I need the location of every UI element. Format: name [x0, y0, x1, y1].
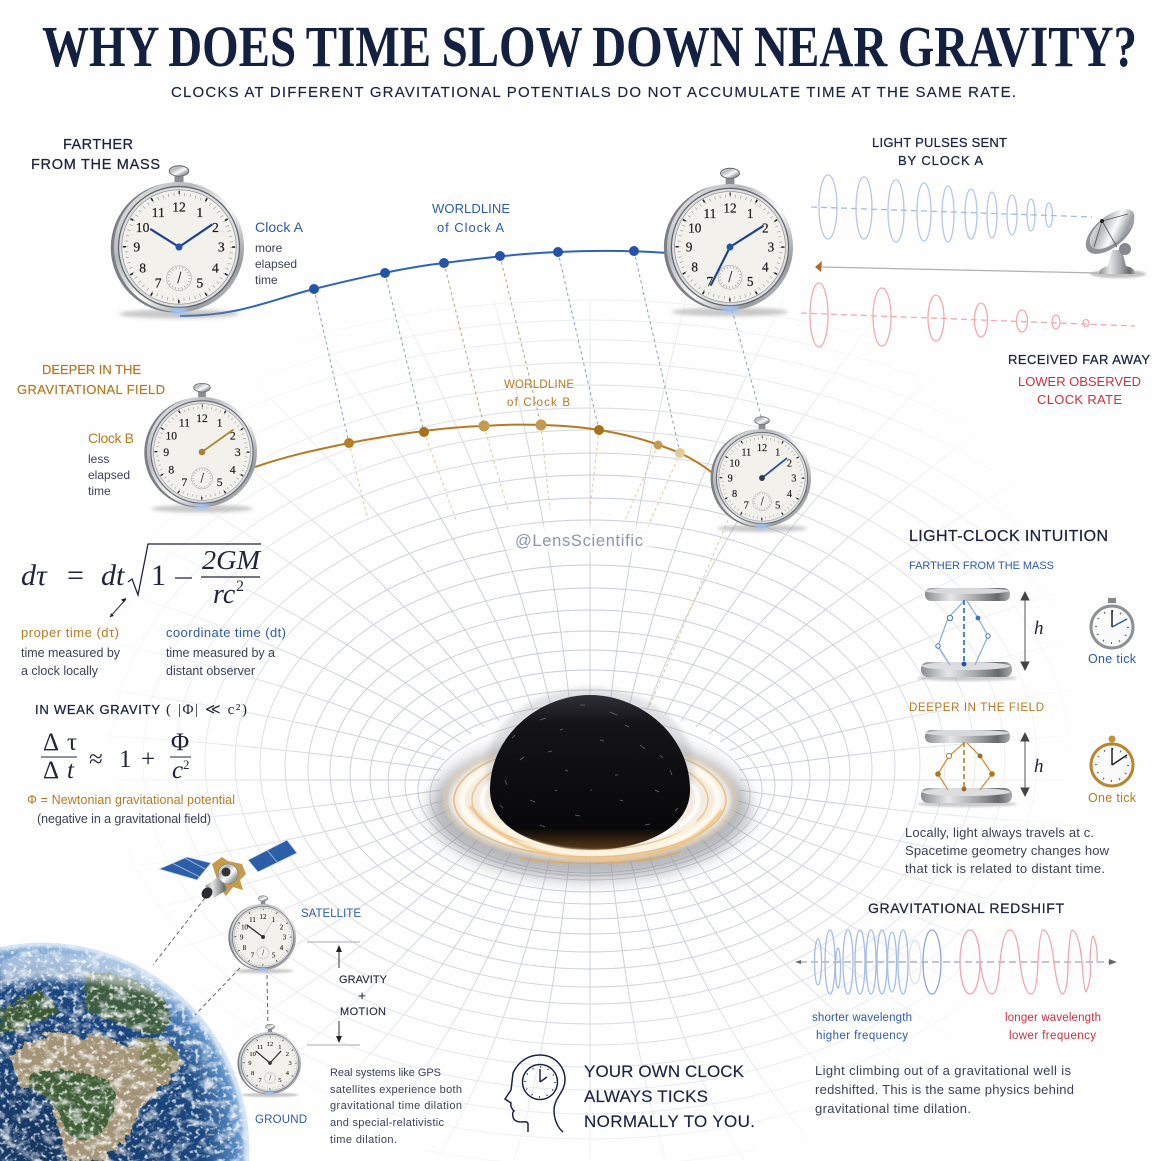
main formula: dτ	[21, 559, 48, 592]
heading	[872, 135, 1007, 168]
weak gravity formula: ≈	[89, 746, 103, 773]
main formula	[21, 544, 262, 617]
clock A farther from mass	[31, 137, 304, 318]
weak gravity formula: Δ	[43, 757, 59, 784]
farther label: FARTHER FROM THE MASS	[909, 560, 1054, 572]
watermark	[508, 526, 650, 552]
pocket watch B right: 10	[729, 459, 740, 470]
light pulses panel	[801, 135, 1150, 407]
gravitational redshift panel	[795, 900, 1117, 1116]
proper time text	[21, 625, 121, 678]
weak gravity formula	[35, 702, 247, 784]
worldline A label: WORLDLINE	[432, 201, 510, 216]
weak gravity formula: Φ	[171, 729, 189, 756]
gps panel	[153, 840, 462, 1146]
callout text: NORMALLY TO YOU.	[584, 1112, 755, 1131]
pocket watch B left	[144, 383, 257, 512]
heading	[17, 362, 165, 397]
clock B label: time	[88, 484, 111, 498]
your own clock callout	[505, 1055, 755, 1132]
gold worldline curve	[255, 425, 714, 474]
pocket watch A left: 9	[133, 240, 140, 255]
gold light clock: h	[1034, 756, 1044, 777]
pocket watch B left: 1	[217, 418, 223, 430]
pocket watch A right: 10	[688, 221, 702, 236]
gold light clock	[917, 730, 1044, 807]
blue labels: shorter wavelength	[812, 1012, 912, 1024]
level lines and arrows	[307, 942, 360, 1045]
heading	[31, 137, 160, 173]
main formula: 2	[236, 578, 244, 595]
pocket watch A right: 1	[747, 206, 753, 221]
coordinate time text: distant observer	[166, 664, 255, 678]
clock B deeper in field	[17, 362, 257, 512]
potential note: (negative in a gravitational field)	[37, 812, 211, 826]
weak gravity formula: +	[141, 746, 155, 773]
worldline B label: of Clock B	[507, 397, 570, 409]
pocket watch A right: 4	[762, 260, 769, 275]
red labels	[1005, 1012, 1101, 1042]
ground clock: 12	[267, 1041, 273, 1048]
blue worldline curve	[180, 251, 668, 316]
gold stopwatch	[1091, 736, 1133, 786]
gravity plus motion: +	[358, 988, 366, 1003]
ground clock: 9	[248, 1060, 251, 1067]
blue stopwatch	[1091, 598, 1133, 648]
gps paragraph: gravitational time dilation	[330, 1100, 462, 1112]
heading: FARTHER	[63, 137, 133, 153]
pocket watch A right: 8	[691, 260, 698, 275]
black hole with accretion disk	[430, 688, 750, 880]
ground clock: 5	[278, 1077, 282, 1084]
clock A label	[255, 219, 304, 287]
watermark: @LensScientific	[515, 532, 643, 550]
weak gravity formula: 1	[119, 746, 132, 773]
proper time text: a clock locally	[21, 664, 99, 678]
heading: FROM THE MASS	[31, 157, 160, 173]
potential note	[27, 793, 235, 826]
pocket watch A left: 3	[218, 240, 225, 255]
pocket watch B right: 1	[775, 447, 780, 458]
pocket watch A left: 8	[139, 260, 146, 275]
received label: RECEIVED FAR AWAY	[1008, 352, 1150, 367]
callout text: YOUR OWN CLOCK	[584, 1062, 745, 1081]
dashed projection lines	[314, 251, 762, 453]
satellite clock: 11	[249, 917, 256, 924]
clock B label: Clock B	[88, 430, 134, 446]
clock B label: elapsed	[88, 468, 130, 482]
pocket watch B left: 12	[196, 413, 208, 425]
ground clock: 4	[286, 1070, 290, 1077]
light clock intuition panel	[905, 528, 1137, 876]
pocket watch A right: 11	[703, 206, 716, 221]
ground clock: 1	[278, 1044, 282, 1051]
ground clock: 10	[249, 1051, 256, 1058]
proper time text: proper time (dτ)	[21, 625, 119, 640]
lower rate label: CLOCK RATE	[1037, 392, 1122, 407]
clock A label: more	[255, 241, 283, 255]
ground clock: 8	[251, 1070, 254, 1077]
red wave	[960, 930, 1097, 994]
weak gravity formula: 2	[183, 757, 190, 772]
callout text	[584, 1062, 755, 1131]
pocket watch B right: 9	[728, 473, 733, 484]
main formula: =	[67, 559, 84, 592]
clock B label	[88, 430, 134, 498]
explanation: that tick is related to distant time.	[905, 861, 1105, 876]
main formula: dt	[101, 559, 125, 592]
pocket watch B left: 11	[179, 418, 190, 430]
satellite clock: 7	[251, 952, 255, 959]
pocket watch A left: 2	[212, 220, 219, 235]
ground label: GROUND	[255, 1114, 307, 1126]
pocket watch B left: 2	[230, 430, 236, 442]
pocket watch A right: 7	[707, 274, 714, 289]
gravity plus motion: GRAVITY	[339, 974, 388, 986]
worldline A label: of Clock A	[437, 220, 504, 235]
earth	[0, 940, 250, 1161]
proper time text: time measured by	[21, 646, 121, 660]
clouds	[0, 940, 250, 1161]
pocket watch A left: 1	[196, 205, 203, 220]
pocket watch B left: 7	[182, 477, 188, 489]
ground clock: 2	[286, 1051, 289, 1058]
pocket watch A left: 11	[152, 205, 165, 220]
ground clock: 7	[258, 1077, 262, 1084]
black sphere	[490, 695, 690, 850]
pocket watch A left: 7	[155, 275, 162, 290]
pocket watch B right: 11	[741, 447, 751, 458]
pocket watch A right: 3	[768, 239, 775, 254]
pocket watch B left: 10	[165, 430, 177, 442]
pocket watch A left: 4	[212, 260, 219, 275]
worldline A label	[432, 201, 510, 235]
gravity plus motion: MOTION	[340, 1006, 386, 1018]
worldline of clock B	[255, 420, 728, 705]
ground clock: 3	[289, 1060, 292, 1067]
pocket watch A right: 2	[762, 221, 769, 236]
blue labels: higher frequency	[816, 1030, 908, 1042]
gps paragraph	[330, 1067, 462, 1146]
description: gravitational time dilation.	[815, 1101, 971, 1116]
red labels: lower frequency	[1009, 1030, 1096, 1042]
double arrow	[110, 599, 126, 617]
description: Light climbing out of a gravitational well is	[815, 1063, 1072, 1078]
gps paragraph: satellites experience both	[330, 1084, 462, 1096]
ground clock	[237, 1024, 301, 1097]
weak gravity formula: c	[172, 757, 183, 784]
pocket watch A right	[664, 168, 793, 316]
return arrow	[815, 261, 1098, 273]
pocket watch B right: 2	[787, 459, 792, 470]
satellite clock: 2	[280, 924, 284, 931]
callout text: ALWAYS TICKS	[584, 1087, 708, 1106]
pocket watch B left: 4	[230, 464, 236, 476]
satellite clock: 4	[280, 945, 284, 952]
pocket watch B right: 4	[787, 489, 792, 500]
pocket watch B right: 12	[757, 443, 767, 454]
main formula: 2GM	[202, 545, 262, 575]
pocket watch B right: 3	[791, 473, 796, 484]
blue pulses	[811, 175, 1092, 242]
lower rate label	[1018, 374, 1141, 407]
pocket watch B right	[711, 417, 811, 532]
weak gravity formula: ( |Φ| ≪ c²)	[166, 702, 247, 718]
blue wave	[814, 930, 941, 994]
clock A label: Clock A	[255, 219, 304, 235]
gps paragraph: and special-relativistic	[330, 1117, 444, 1129]
satellite	[159, 840, 297, 901]
fading dashed lines	[349, 425, 728, 705]
worldline of clock A	[180, 246, 762, 453]
heading: DEEPER IN THE	[42, 362, 141, 377]
satellite clock: 10	[241, 924, 249, 931]
red labels: longer wavelength	[1005, 1012, 1101, 1024]
pocket watch A left: 5	[196, 275, 203, 290]
worldline dots	[344, 420, 685, 458]
weak gravity formula: IN WEAK GRAVITY	[35, 702, 160, 717]
lower rate label: LOWER OBSERVED	[1018, 374, 1141, 389]
worldline B label	[504, 379, 574, 409]
worldline dots	[309, 246, 639, 294]
pocket watch A right: 12	[723, 200, 737, 215]
heading: GRAVITATIONAL REDSHIFT	[868, 900, 1064, 916]
description: redshifted. This is the same physics behind	[815, 1082, 1074, 1097]
front disk arcs	[486, 812, 696, 852]
pocket watch A left: 10	[136, 220, 150, 235]
gps paragraph: Real systems like GPS	[330, 1067, 441, 1079]
gravity plus motion	[339, 974, 388, 1018]
pocket watch B left: 3	[235, 447, 241, 459]
gps paragraph: time dilation.	[330, 1134, 397, 1146]
dashed links	[153, 898, 268, 1030]
explanation: Spacetime geometry changes how	[905, 843, 1110, 858]
pocket watch B right: 5	[775, 500, 780, 511]
one tick gold: One tick	[1088, 791, 1137, 805]
coordinate time text: coordinate time (dt)	[166, 625, 286, 640]
red pulses	[801, 283, 1135, 347]
continents	[0, 973, 185, 1161]
worldline B label: WORLDLINE	[504, 379, 574, 391]
pocket watch A right: 5	[747, 274, 754, 289]
pocket watch A left	[111, 166, 244, 318]
explanation: Locally, light always travels at c.	[905, 825, 1094, 840]
explanation	[905, 825, 1110, 876]
one tick blue: One tick	[1088, 652, 1137, 666]
satellite label: SATELLITE	[301, 908, 361, 920]
heading: LIGHT-CLOCK INTUITION	[909, 528, 1108, 545]
potential note: Φ = Newtonian gravitational potential	[27, 793, 235, 807]
blue labels	[812, 1012, 912, 1042]
satellite clock	[228, 896, 296, 973]
heading: GRAVITATIONAL FIELD	[17, 382, 165, 397]
clock A label: time	[255, 273, 278, 287]
deeper label: DEEPER IN THE FIELD	[909, 702, 1044, 714]
pocket watch A left: 12	[172, 199, 186, 214]
blue light clock	[917, 588, 1044, 681]
ground clock: 11	[257, 1044, 263, 1051]
coordinate time text	[166, 625, 286, 678]
weak gravity formula: Δ τ	[43, 729, 77, 756]
heading: BY CLOCK A	[898, 153, 983, 168]
heading: LIGHT PULSES SENT	[872, 135, 1007, 150]
satellite clock: 1	[272, 917, 276, 924]
satellite clock: 9	[240, 934, 244, 941]
pocket watch B left: 5	[217, 477, 223, 489]
clock B label: less	[88, 452, 109, 466]
satellite clock: 12	[260, 914, 267, 921]
satellite clock: 3	[283, 934, 287, 941]
pocket watch B left: 8	[168, 464, 174, 476]
satellite clock: 5	[272, 952, 276, 959]
main formula: rc	[213, 579, 236, 610]
icon: head with clock	[505, 1055, 565, 1132]
satellite dish receiver	[1078, 202, 1146, 278]
weak gravity formula: t	[67, 757, 75, 784]
satellite clock: 8	[243, 945, 247, 952]
blue light clock: h	[1034, 618, 1044, 639]
main formula: 1	[151, 559, 166, 592]
pocket watch B right: 8	[732, 489, 737, 500]
pocket watch B right: 7	[744, 500, 749, 511]
axis	[795, 959, 1117, 965]
pocket watch A right: 9	[686, 239, 693, 254]
coordinate time text: time measured by a	[166, 646, 275, 660]
subtitle: CLOCKS AT DIFFERENT GRAVITATIONAL POTENTIALS DO NOT ACCUMULATE TIME AT THE SAME RATE.	[171, 84, 1016, 101]
spacetime funnel grid	[138, 300, 1042, 1161]
description	[815, 1063, 1074, 1116]
pocket watch B left: 9	[163, 447, 169, 459]
clock A label: elapsed	[255, 257, 297, 271]
